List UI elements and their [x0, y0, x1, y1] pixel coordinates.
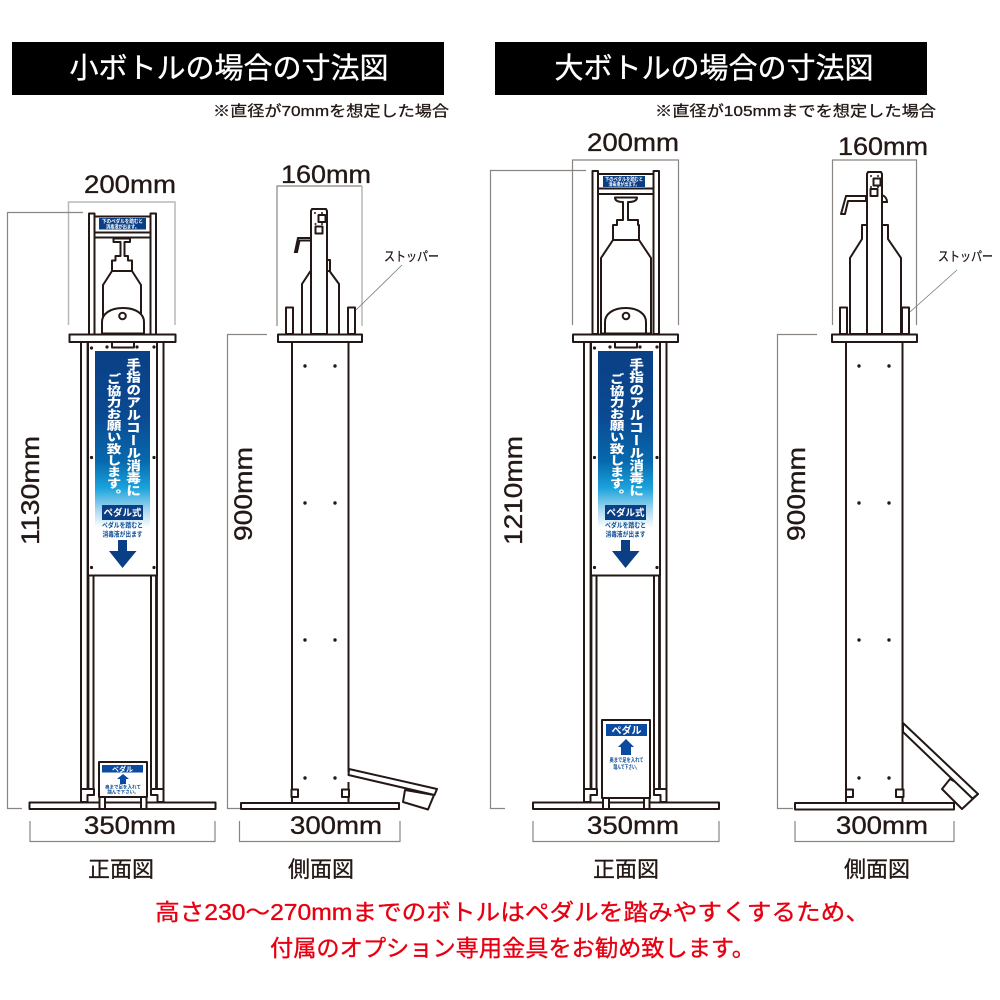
dimension: total height 1130mm: 1130mm: [17, 436, 45, 545]
top sign: 消毒液が出ます。: [106, 222, 139, 230]
base plate: [241, 803, 399, 809]
pedal sign: 奥まで足を入れて: [610, 756, 644, 764]
main panel: [591, 342, 660, 576]
diagram: large bottle side view: [778, 133, 993, 810]
heading: small bottle: [12, 42, 444, 95]
upright panel: [292, 342, 349, 803]
platform: [278, 334, 362, 342]
sign: hand alcohol disinfection: ご協力お願い致します。: [105, 372, 121, 501]
dimension: total height 1130mm: [8, 212, 83, 808]
sign: hand alcohol disinfection: ペダルを踏むと: [102, 520, 143, 530]
caption: front view: 正面図: [593, 857, 659, 882]
dimension: side width 160mm: [277, 161, 371, 326]
sign: hand alcohol disinfection: 手指のアルコール消毒に: [627, 357, 644, 497]
dimension: total height 1210mm: [490, 170, 586, 808]
pedal sign: [99, 762, 147, 809]
dimension: panel height 900mm: [228, 334, 267, 808]
pedal sign: ペダル: [612, 724, 642, 737]
caption: side view: 側面図: [288, 857, 354, 882]
heading: large bottle: 大ボトルの場合の寸法図: [554, 52, 874, 85]
base plate: [795, 803, 954, 810]
dimension: total height 1210mm: 1210mm: [500, 436, 528, 545]
stopper label: [356, 249, 439, 310]
top sign: 下のペダルを踏むと: [605, 176, 643, 183]
note: large bottle diameter: ※直径が105mmまでを想定した場合: [655, 103, 936, 120]
red note: 高さ230～270mmまでのボトルはペダルを踏みやすくするため、: [155, 899, 870, 925]
upright panel: [846, 342, 904, 803]
caption: side view: 側面図: [844, 857, 910, 882]
main panel: [88, 342, 157, 576]
diagram: small bottle front view: [8, 171, 216, 809]
bottle side outline: [850, 225, 901, 334]
base plate: [533, 802, 719, 809]
heading: large bottle: [495, 42, 927, 95]
pedal sign: ペダル: [112, 764, 133, 774]
dimension: panel height 900mm: 900mm: [783, 447, 811, 541]
platform: [573, 334, 678, 342]
dimension: side base width 300mm: [795, 812, 954, 842]
top sign: [99, 217, 146, 230]
red note: 付属のオプション専用金具をお勧め致します。: [270, 935, 755, 961]
lower frame: [584, 342, 666, 802]
dimension: panel height 900mm: 900mm: [230, 447, 258, 541]
pedal sign: 奥まで足を入れて: [105, 784, 141, 790]
bottle holder: [102, 308, 144, 334]
dimension: base width 350mm: 350mm: [84, 812, 176, 840]
dimension: side width 160mm: [832, 133, 928, 325]
red note: [155, 899, 870, 961]
bottle: [103, 238, 141, 334]
dimension: side width 160mm: 160mm: [281, 161, 371, 189]
stoppers: [286, 308, 355, 334]
dimension: panel height 900mm: [778, 334, 817, 808]
sign: hand alcohol disinfection: 消毒液が出ます: [102, 530, 143, 538]
diagram: small bottle side view: [228, 161, 439, 810]
sign: hand alcohol disinfection: [598, 351, 653, 572]
sign: hand alcohol disinfection: ご協力お願い致します。: [608, 372, 624, 501]
dimension: side width 160mm: 160mm: [838, 133, 928, 161]
dimension: front width 200mm: [572, 129, 679, 325]
base plate: [30, 802, 216, 809]
bottle side outline: [302, 271, 339, 334]
platform: [70, 334, 176, 342]
heading: small bottle: 小ボトルの場合の寸法図: [70, 52, 388, 85]
note: small bottle diameter: ※直径が70mmを想定した場合: [213, 103, 449, 120]
platform: [832, 334, 917, 342]
dimension: front width 200mm: 200mm: [84, 171, 176, 199]
dimension: base width 350mm: [533, 812, 719, 842]
caption: front view: 正面図: [88, 857, 154, 882]
sign: hand alcohol disinfection: [95, 351, 150, 572]
sign: hand alcohol disinfection: 消毒液が出ます: [606, 530, 646, 538]
top sign: 消毒液が出ます。: [608, 181, 640, 188]
stopper label: [910, 249, 993, 312]
dimension: side base width 300mm: [240, 812, 400, 842]
sign: hand alcohol disinfection: 手指のアルコール消毒に: [124, 357, 141, 497]
sign: hand alcohol disinfection: ペダルを踏むと: [605, 520, 646, 530]
bottle holder: [605, 308, 646, 334]
top sign: 下のペダルを踏むと: [102, 217, 143, 225]
pedal sign: 踏んで下さい。: [614, 763, 640, 771]
top frame uprights: [89, 214, 156, 334]
pedal: [903, 723, 978, 809]
top sign: [603, 176, 645, 188]
dimension: front width 200mm: 200mm: [587, 129, 679, 157]
dimension: front width 200mm: [68, 171, 176, 325]
dimension: side base width 300mm: 300mm: [836, 812, 928, 840]
sign: hand alcohol disinfection: ペダル式: [103, 507, 142, 519]
stoppers: [840, 308, 909, 334]
pedal sign: [602, 720, 650, 809]
bottle: [601, 198, 651, 334]
dimension: base width 350mm: 350mm: [587, 812, 679, 840]
pedal sign: 踏んで下さい。: [107, 788, 139, 796]
top frame uprights: [592, 171, 659, 334]
lower frame: [81, 342, 164, 802]
diagram: large bottle front view: [490, 129, 719, 809]
dimension: base width 350mm: [30, 812, 215, 842]
sign: hand alcohol disinfection: ペダル式: [606, 507, 645, 519]
pedal: [348, 769, 437, 810]
pump post: [295, 209, 330, 334]
stopper label: ストッパー: [384, 249, 439, 264]
dimension: side base width 300mm: 300mm: [290, 812, 382, 840]
pump post: [841, 172, 887, 334]
